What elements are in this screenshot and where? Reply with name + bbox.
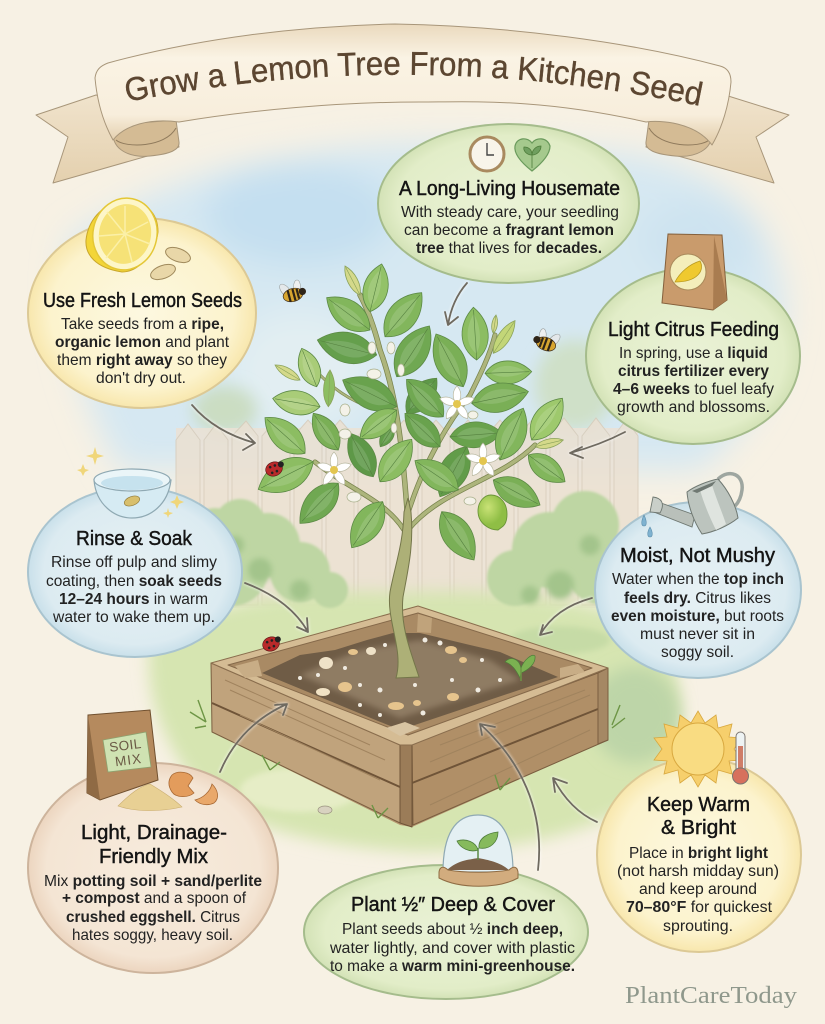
- heading: [647, 794, 750, 839]
- body text: hates soggy, heavy soil.: [72, 927, 233, 944]
- body text: With steady care, your seedling: [401, 204, 619, 221]
- watermark: PlantCareToday: [625, 983, 797, 1009]
- body text: [617, 845, 779, 935]
- leaves: [251, 261, 573, 568]
- icon: sand pile: [118, 784, 182, 811]
- icon: heart with sprout: [515, 139, 550, 171]
- trunk and branches: [315, 295, 535, 678]
- body text: feels dry. Citrus likes: [624, 590, 771, 607]
- body text: [613, 345, 774, 416]
- icon: sun: [654, 711, 742, 787]
- arrow: mix to bed: [220, 704, 287, 772]
- body text: [46, 554, 222, 626]
- body text: crushed eggshell. Citrus: [66, 909, 240, 926]
- arrow: warmth to bed: [553, 778, 597, 822]
- body text: [55, 316, 230, 387]
- body text: soggy soil.: [661, 644, 734, 661]
- icon: lemon and seeds: [86, 192, 192, 283]
- right tail: [646, 95, 789, 183]
- icon: soil mix bag: [87, 710, 158, 800]
- body text: water lightly, and cover with plastic: [329, 940, 575, 957]
- body text: 12–24 hours in warm: [59, 591, 208, 608]
- icon: sparkles: [77, 447, 184, 518]
- heading: Use Fresh Lemon Seeds: [43, 290, 242, 312]
- body text: citrus fertilizer every: [618, 363, 769, 380]
- lawn: [149, 591, 680, 852]
- heading: Light Citrus Feeding: [608, 319, 779, 341]
- body text: organic lemon and plant: [55, 334, 230, 351]
- label: soil mix: MIX: [114, 751, 142, 769]
- label: soil mix: SOIL: [108, 736, 142, 755]
- body text: 4–6 weeks to fuel leafy: [613, 381, 774, 398]
- body text: Mix potting soil + sand/perlite: [44, 873, 262, 890]
- bees: [276, 277, 563, 355]
- panel: rinse and soak: [28, 447, 242, 657]
- arrow: seeds to tree: [192, 405, 255, 450]
- body text: Plant seeds about ½ inch deep,: [342, 921, 563, 938]
- icon: glass cloche with seedling: [439, 815, 518, 886]
- body text: them right away so they: [57, 352, 227, 369]
- heading: [81, 822, 227, 868]
- heading: Light, Drainage-: [81, 822, 227, 844]
- body text: + compost and a spoon of: [62, 890, 247, 907]
- panel: light, drainage-friendly mix: [28, 710, 278, 973]
- heading: Friendly Mix: [99, 846, 208, 868]
- panel: a long-living housemate: [378, 124, 639, 283]
- blossoms and buds: [316, 342, 501, 505]
- bushes: [193, 491, 645, 610]
- arrow: rinse to bed: [245, 583, 308, 632]
- left tail: [36, 95, 179, 183]
- arrows: [192, 283, 625, 870]
- background foliage and fence: [176, 340, 638, 608]
- body text: [44, 873, 262, 944]
- body text: [329, 921, 575, 975]
- body text: 70–80°F for quickest: [626, 899, 773, 916]
- panel: keep warm and bright: [597, 711, 801, 952]
- panel: plant deep and cover: [304, 815, 588, 999]
- title: Grow a Lemon Tree From a Kitchen Seed: [126, 52, 703, 106]
- icon: fertilizer bag: [662, 234, 727, 310]
- body text: Place in bright light: [629, 845, 769, 862]
- body text: [401, 204, 619, 257]
- body text: [611, 571, 784, 661]
- body text: (not harsh midday sun): [617, 863, 779, 880]
- body text: must never sit in: [640, 626, 755, 643]
- heading: Keep Warm: [647, 794, 750, 816]
- heading: A Long-Living Housemate: [399, 178, 620, 200]
- body text: coating, then soak seeds: [46, 573, 222, 590]
- arrow: plant to bed: [480, 724, 539, 870]
- arrow: moist to bed: [540, 598, 592, 635]
- body text: Take seeds from a ripe,: [61, 316, 224, 333]
- ladybugs: [261, 459, 287, 653]
- body text: sprouting.: [663, 918, 733, 935]
- body text: Water when the top inch: [612, 571, 784, 588]
- green lemon fruit: [478, 495, 507, 530]
- icon: watering can: [642, 474, 742, 537]
- label: soil mix: [108, 736, 144, 770]
- sky wash: [66, 142, 785, 470]
- body text: even moisture, but roots: [611, 608, 784, 625]
- arrow: housemate to tree: [445, 283, 467, 325]
- panel: moist, not mushy: [595, 474, 801, 678]
- body text: water to wake them up.: [52, 609, 215, 626]
- icon: eggshells: [169, 772, 218, 805]
- body text: tree that lives for decades.: [416, 240, 602, 257]
- banner ribbon: [36, 24, 789, 183]
- heading: Rinse & Soak: [76, 528, 193, 550]
- body text: to make a warm mini-greenhouse.: [330, 958, 575, 975]
- arrow: feeding to tree: [570, 432, 625, 458]
- heading: Moist, Not Mushy: [620, 545, 775, 567]
- banner body: [95, 24, 731, 145]
- heading: & Bright: [661, 817, 736, 839]
- body text: can become a fragrant lemon: [404, 222, 614, 239]
- body text: growth and blossoms.: [617, 399, 770, 416]
- raised wooden garden bed: [190, 606, 625, 827]
- icon: clock: [470, 137, 504, 171]
- body text: In spring, use a liquid: [619, 345, 768, 362]
- body text: and keep around: [639, 881, 757, 898]
- panel: light citrus feeding: [586, 234, 800, 444]
- icon: glass bowl with seed: [94, 469, 171, 518]
- heading: Plant ½″ Deep & Cover: [351, 894, 555, 916]
- body text: don't dry out.: [96, 370, 186, 387]
- panel: use fresh lemon seeds: [28, 192, 256, 408]
- body text: Rinse off pulp and slimy: [51, 554, 217, 571]
- lemon tree: [251, 261, 573, 678]
- icon: thermometer: [732, 732, 748, 784]
